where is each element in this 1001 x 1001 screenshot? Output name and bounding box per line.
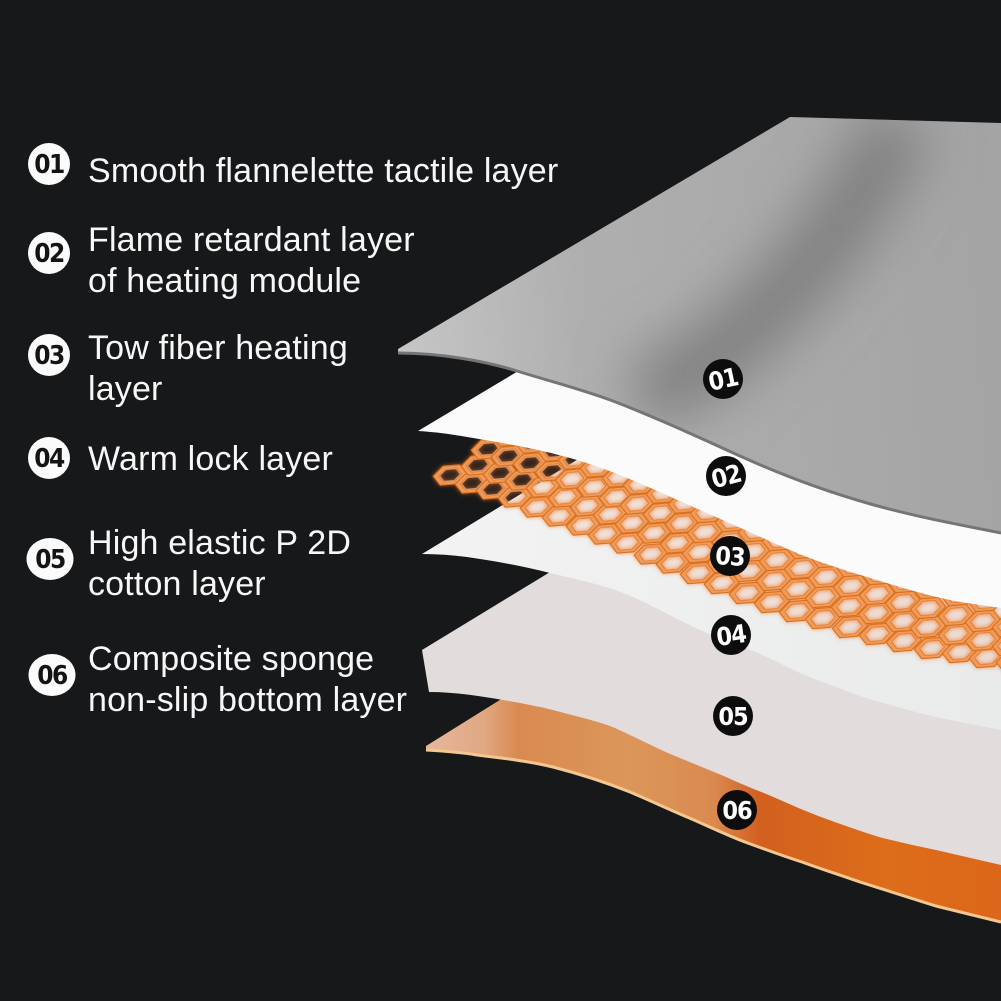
legend list — [26, 143, 558, 719]
legend 05: High elastic P 2D — [88, 524, 351, 562]
layer 03: orange honeycomb heating band — [433, 426, 1001, 672]
legend 01: 01 — [34, 150, 64, 180]
badge 03 on layer — [710, 536, 750, 576]
legend 03: Tow fiber heating — [88, 329, 348, 367]
legend 06: 06 — [37, 661, 68, 691]
legend 01: Smooth flannelette tactile layer — [88, 152, 558, 190]
badge 05 on layer — [713, 696, 753, 736]
layer 01: grey flannelette sheet — [398, 117, 1001, 534]
badge 01 on layer: 01 — [706, 362, 741, 397]
badge 05 on layer: 05 — [718, 702, 748, 731]
legend 05: cotton layer — [88, 565, 266, 603]
legend 05 — [26, 524, 351, 603]
badge 06 on layer: 06 — [722, 796, 752, 825]
legend 03 — [28, 329, 348, 408]
badge 06 on layer — [717, 790, 757, 830]
badge 04 on layer — [711, 615, 751, 655]
legend 03: 03 — [34, 341, 64, 371]
badge 03 on layer: 03 — [714, 541, 746, 572]
legend 02: Flame retardant layer — [88, 221, 415, 259]
layer 04: warm lock sheet — [422, 455, 1001, 730]
legend 02: 02 — [34, 239, 64, 269]
legend 02 — [28, 221, 415, 300]
legend 02: of heating module — [88, 262, 361, 300]
legend 06: Composite sponge — [88, 640, 374, 678]
badge 04 on layer: 04 — [715, 619, 748, 652]
numbered badges on the layers — [703, 359, 757, 830]
legend 05: 05 — [35, 545, 65, 575]
layer 05: cotton sheet — [422, 566, 1001, 865]
layer 02: white flame retardant sheet — [418, 364, 1001, 608]
legend 04: Warm lock layer — [88, 440, 333, 478]
layer 06: orange non-slip bottom sheet — [426, 698, 1001, 923]
badge 02 on layer: 02 — [708, 459, 744, 494]
legend 03: layer — [88, 370, 163, 408]
legend 06: non-slip bottom layer — [88, 681, 407, 719]
legend 06 — [28, 640, 407, 719]
legend 04: 04 — [34, 444, 65, 474]
